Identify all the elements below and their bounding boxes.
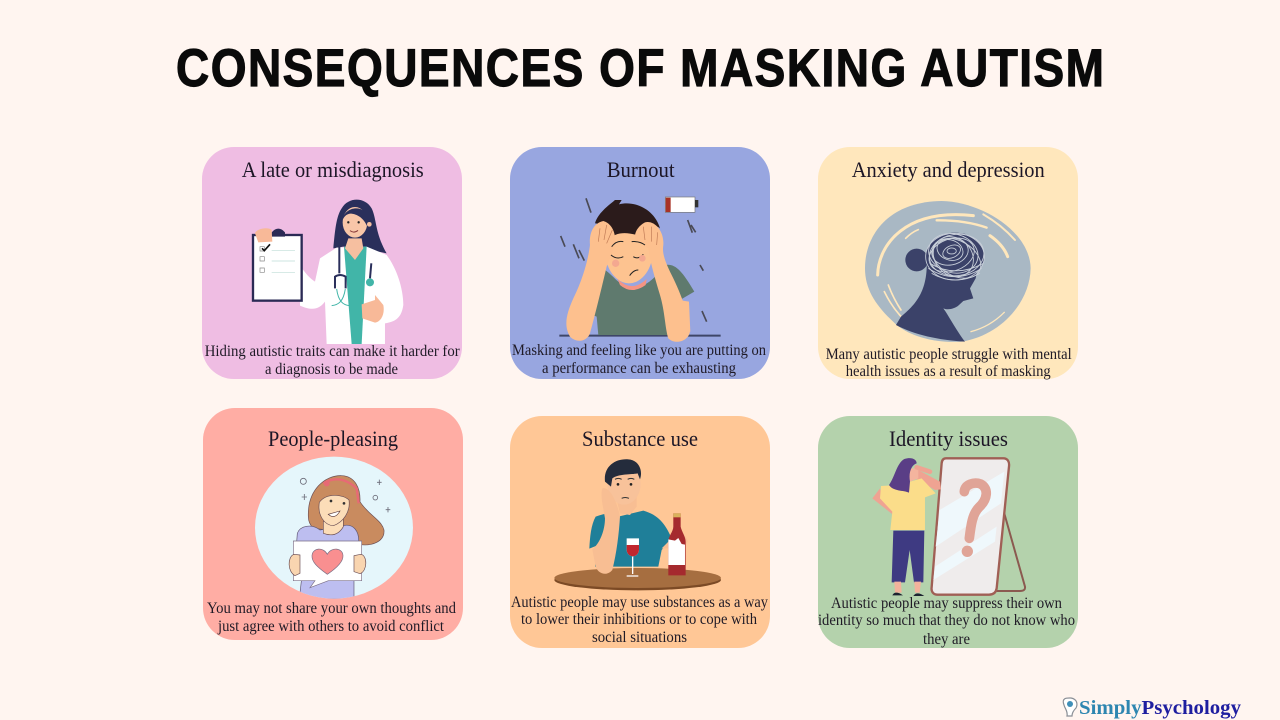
heading: substance use: Substance use xyxy=(582,426,698,451)
description: substance use: social situations xyxy=(592,629,687,646)
illustration: head silhouette with scribbled mind xyxy=(865,201,1031,342)
description: substance use xyxy=(511,594,768,646)
description: identity issues xyxy=(818,595,1075,648)
description: burnout xyxy=(512,342,766,377)
icon: head with brain xyxy=(1063,698,1077,716)
panel: identity issues xyxy=(818,416,1078,648)
description: identity issues: identity so much that they do not know who xyxy=(818,612,1075,629)
description: substance use: Autistic people may use substances as a way xyxy=(511,594,768,611)
illustration: woman and mirror with question mark xyxy=(872,458,1025,596)
description: anxiety and depression xyxy=(826,346,1072,380)
heading: a late or misdiagnosis: A late or misdiagnosis xyxy=(242,157,424,182)
illustration: man with wine at table xyxy=(554,459,721,590)
description: substance use: to lower their inhibitions or to cope with xyxy=(521,611,757,628)
illustration: exhausted man xyxy=(559,197,721,342)
description: identity issues: Autistic people may suppress their own xyxy=(831,595,1062,612)
description: people-pleasing: just agree with others to avoid conflict xyxy=(217,618,445,635)
description: burnout: a performance can be exhausting xyxy=(542,360,736,377)
panel: substance use xyxy=(510,416,770,648)
logo: Simply Psychology xyxy=(1063,697,1241,719)
title: CONSEQUENCES OF MASKING AUTISM xyxy=(176,39,1104,98)
heading: people-pleasing: People-pleasing xyxy=(268,426,398,451)
heading: identity issues: Identity issues xyxy=(889,426,1008,451)
illustration: woman holding heart sign xyxy=(255,457,413,599)
panel: a late or misdiagnosis xyxy=(202,147,462,379)
description: people-pleasing: You may not share your own thoughts and xyxy=(207,600,456,617)
description: anxiety and depression: Many autistic people struggle with mental xyxy=(826,346,1072,363)
heading: burnout: Burnout xyxy=(607,157,675,182)
description: identity issues: they are xyxy=(923,631,970,648)
description: a late or misdiagnosis: Hiding autistic traits can make it harder for xyxy=(205,343,460,360)
description: a late or misdiagnosis: a diagnosis to be made xyxy=(265,361,398,378)
panel: anxiety and depression xyxy=(818,147,1078,380)
description: people-pleasing xyxy=(207,600,456,635)
description: a late or misdiagnosis xyxy=(205,343,460,378)
illustration: doctor with clipboard xyxy=(253,200,403,344)
panel: burnout xyxy=(510,147,770,379)
description: anxiety and depression: health issues as a result of masking xyxy=(846,363,1051,380)
wordmark: SimplyPsychology xyxy=(1079,697,1241,719)
description: burnout: Masking and feeling like you are putting on xyxy=(512,342,766,359)
panel: people-pleasing xyxy=(203,408,463,640)
heading: anxiety and depression: Anxiety and depression xyxy=(852,157,1045,182)
